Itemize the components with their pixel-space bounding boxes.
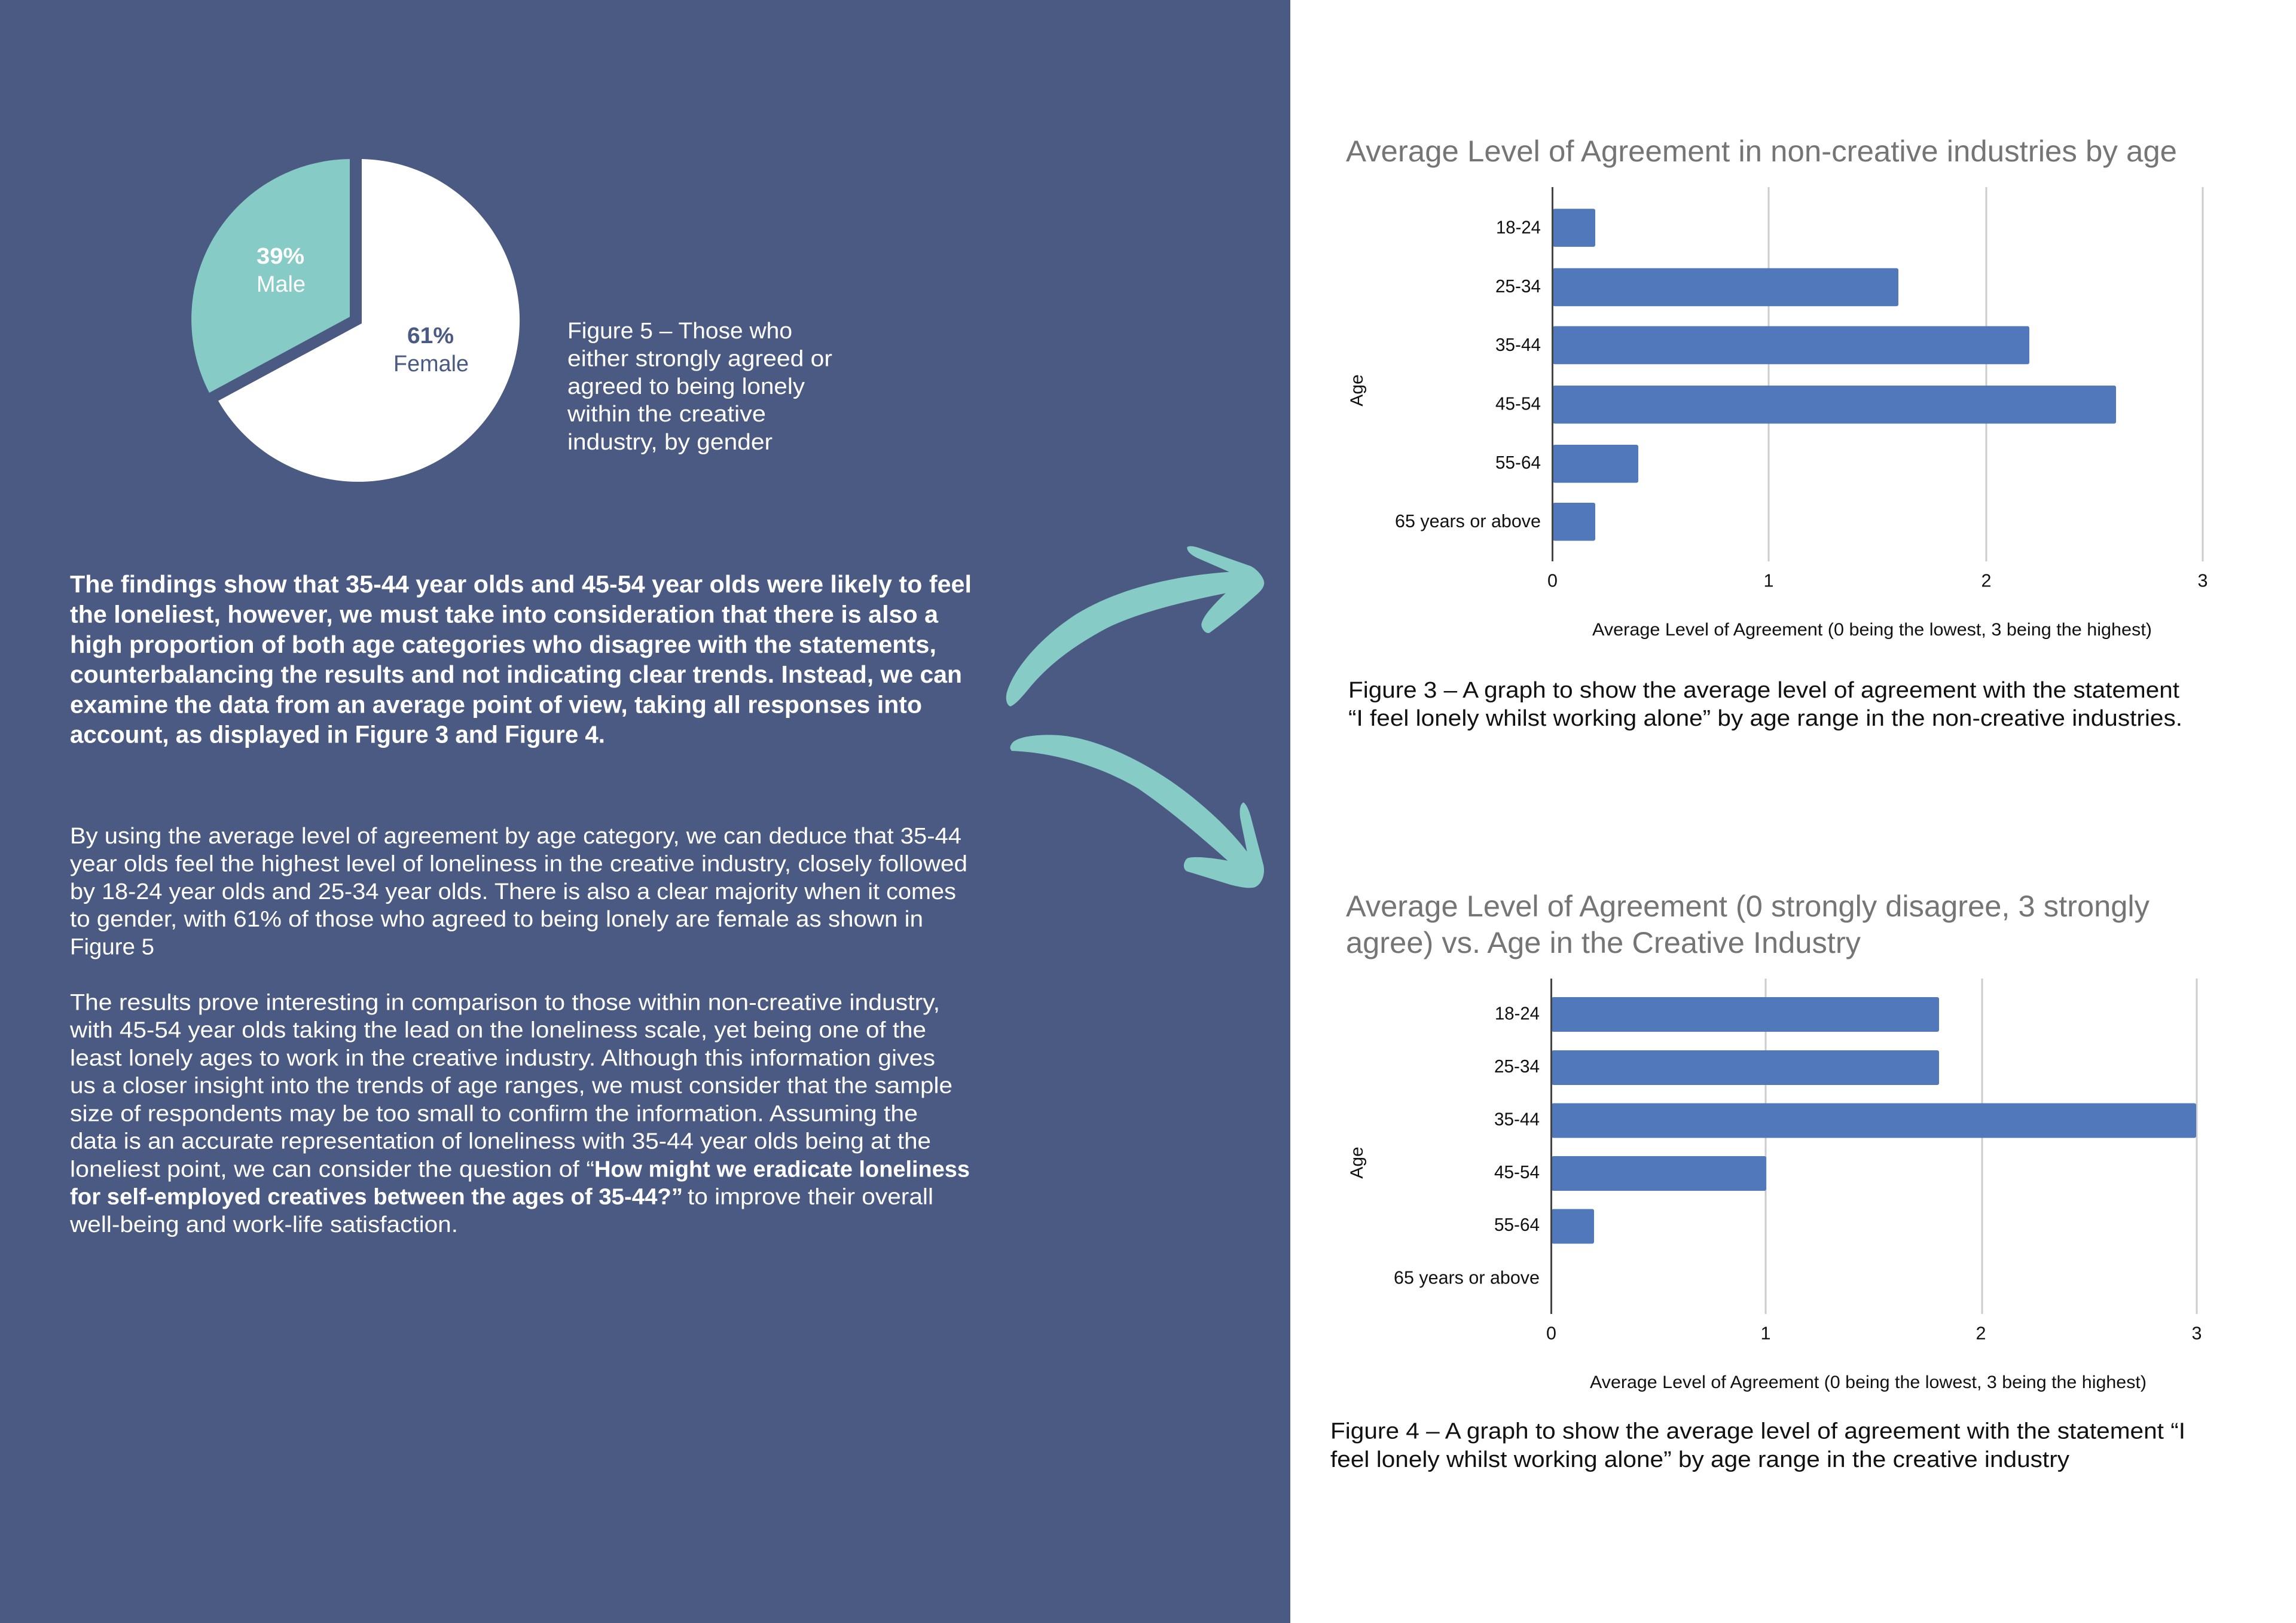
body paragraph: average level of agreement	[70, 824, 967, 960]
body paragraph: comparison with non-creative industry: for self-employed creatives between the ages of 35-44?”	[70, 1185, 683, 1210]
bars	[1552, 997, 2196, 1243]
age labels	[1394, 1004, 1540, 1288]
figure 4 caption: Figure 4 – A graph to show the average level of agreement with the statement “I	[1330, 1419, 2185, 1444]
age labels: 65 years or above	[1394, 1268, 1540, 1288]
body paragraph: average level of agreement: by 18-24 year olds and 25-34 year olds. There is also a clear majority when it comes	[70, 879, 956, 904]
body paragraph: average level of agreement: year olds feel the highest level of loneliness in the creative industry, closely followed	[70, 851, 967, 876]
arrow: up to figure 3	[1006, 546, 1264, 707]
male label: 39%	[257, 244, 304, 269]
age labels: 45-54	[1494, 1162, 1540, 1182]
body paragraph: comparison with non-creative industry: loneliest point, we can consider the question of “	[70, 1157, 594, 1182]
figure 5 caption	[567, 319, 832, 455]
x axis ticks: 2	[1976, 1324, 1986, 1344]
female label	[393, 323, 469, 377]
x axis ticks: 3	[2198, 571, 2208, 591]
body paragraph: average level of agreement: By using the average level of agreement by age category, we can deduce that 35-44	[70, 824, 961, 849]
figure 3 caption	[1348, 678, 2182, 731]
body paragraph: comparison with non-creative industry: How might we eradicate loneliness	[594, 1157, 970, 1182]
bars	[1553, 209, 2116, 541]
figure 5 caption: Figure 5 – Those who	[567, 319, 792, 344]
x axis ticks: 2	[1981, 571, 1991, 591]
left panel background	[0, 0, 1290, 1623]
body paragraph: average level of agreement: to gender, with 61% of those who agreed to being lonely are female as shown in	[70, 907, 923, 932]
bold findings paragraph: account, as displayed in Figure 3 and Figure 4.	[70, 721, 605, 748]
body paragraph: comparison with non-creative industry: us a closer insight into the trends of age ranges, we must consider that the sample	[70, 1074, 952, 1099]
age labels: 25-34	[1495, 276, 1541, 297]
age labels: 65 years or above	[1395, 511, 1541, 531]
right panel background	[1290, 0, 2296, 1623]
chart title: Average Level of Agreement in non-creative industries by age	[1346, 135, 2177, 168]
age labels: 18-24	[1495, 1004, 1540, 1024]
figure 5 caption: agreed to being lonely	[567, 374, 805, 399]
x axis ticks: 0	[1547, 571, 1558, 591]
x axis ticks	[1547, 571, 2208, 591]
pie slice: male 39%	[191, 159, 350, 393]
figure 5 caption: within the creative	[567, 402, 766, 427]
chart title: agree) vs. Age in the Creative Industry	[1346, 926, 1861, 959]
age labels: 18-24	[1496, 218, 1541, 238]
body paragraph: comparison with non-creative industry: The results prove interesting in comparison to those within non-creative industry,	[70, 990, 940, 1015]
body paragraph: comparison with non-creative industry	[69, 990, 970, 1237]
x axis ticks	[1546, 1324, 2202, 1344]
y axis title: Age	[1347, 374, 1367, 406]
figure 5 caption: industry, by gender	[567, 430, 773, 455]
x axis ticks: 0	[1546, 1324, 1556, 1344]
pie chart: gender split	[191, 159, 520, 482]
age labels	[1395, 218, 1541, 531]
y axis title: Age	[1347, 1147, 1367, 1179]
age labels: 35-44	[1494, 1109, 1540, 1130]
bold findings paragraph: the loneliest, however, we must take into consideration that there is also a	[70, 600, 939, 628]
chart: figure 4 creative industry	[1346, 890, 2202, 1392]
body paragraph: comparison with non-creative industry: size of respondents may be too small to confirm the information. Assuming the	[70, 1101, 918, 1126]
figure 4 caption: feel lonely whilst working alone” by age range in the creative industry	[1330, 1447, 2069, 1472]
x axis ticks: 1	[1764, 571, 1773, 591]
bold findings paragraph: examine the data from an average point of view, taking all responses into	[70, 691, 922, 719]
chart: figure 3 non-creative industries	[1346, 135, 2208, 640]
bold findings paragraph: counterbalancing the results and not indicating clear trends. Instead, we can	[70, 661, 962, 688]
age labels: 45-54	[1495, 393, 1541, 414]
body paragraph: comparison with non-creative industry: well-being and work-life satisfaction.	[69, 1212, 458, 1237]
male label: Male	[257, 272, 306, 297]
body paragraph: average level of agreement: Figure 5	[70, 935, 154, 960]
figure 4 caption	[1330, 1419, 2185, 1472]
figure 5 caption: either strongly agreed or	[567, 347, 832, 372]
age labels: 55-64	[1494, 1215, 1540, 1235]
arrow: down to figure 4	[1010, 735, 1264, 888]
body paragraph: comparison with non-creative industry: data is an accurate representation of loneliness with 35-44 year olds being at the	[70, 1129, 931, 1154]
bold findings paragraph: The findings show that 35-44 year olds and 45-54 year olds were likely to feel	[70, 570, 972, 598]
male label	[257, 244, 306, 297]
pie slice: female 61%	[218, 159, 520, 482]
age labels: 25-34	[1494, 1056, 1540, 1077]
female label: Female	[393, 352, 469, 377]
bold findings paragraph	[70, 570, 972, 748]
body paragraph: comparison with non-creative industry: with 45-54 year olds taking the lead on the loneliness scale, yet being one of the	[69, 1018, 926, 1043]
body paragraph: comparison with non-creative industry: least lonely ages to work in the creative industry. Although this information gives	[70, 1046, 935, 1071]
x axis ticks: 1	[1761, 1324, 1770, 1344]
figure 3 caption: “I feel lonely whilst working alone” by age range in the non-creative industries.	[1348, 706, 2182, 731]
figure 3 caption: Figure 3 – A graph to show the average level of agreement with the statement	[1348, 678, 2179, 703]
bold findings paragraph: high proportion of both age categories who disagree with the statements,	[70, 631, 936, 658]
age labels: 35-44	[1495, 335, 1541, 355]
x axis title: Average Level of Agreement (0 being the lowest, 3 being the highest)	[1592, 620, 2152, 640]
body paragraph: comparison with non-creative industry: to improve their overall	[688, 1185, 933, 1210]
x axis title: Average Level of Agreement (0 being the lowest, 3 being the highest)	[1590, 1373, 2147, 1392]
chart title: Average Level of Agreement (0 strongly disagree, 3 strongly	[1346, 890, 2150, 923]
chart title	[1346, 890, 2150, 959]
female label: 61%	[407, 323, 454, 349]
x axis ticks: 3	[2192, 1324, 2202, 1344]
age labels: 55-64	[1495, 453, 1541, 473]
